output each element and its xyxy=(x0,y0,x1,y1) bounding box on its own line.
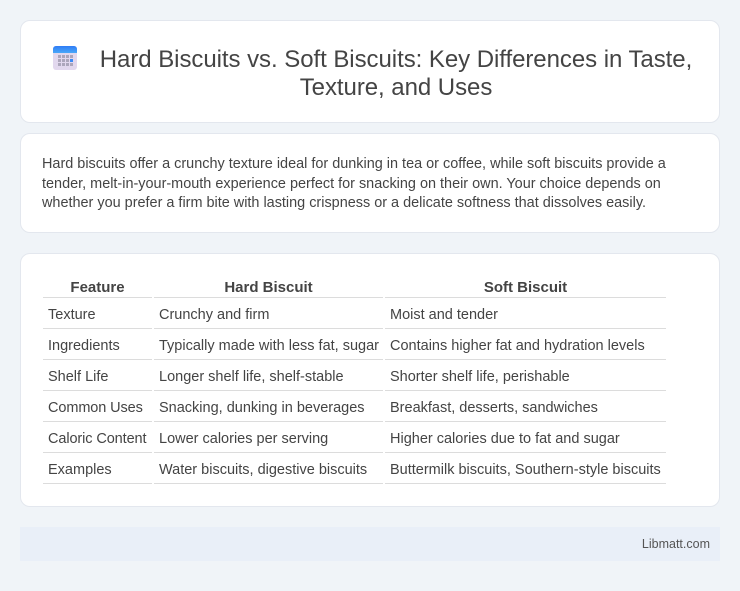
row: Shelf Life: Shorter shelf life, perishable xyxy=(390,369,570,385)
panel: title card xyxy=(20,20,720,123)
row: Examples: Buttermilk biscuits, Southern-style biscuits xyxy=(390,462,661,478)
footer text: Libmatt.com xyxy=(642,537,710,551)
row: Ingredients xyxy=(43,338,666,360)
row: Shelf Life xyxy=(43,369,666,391)
row: Caloric Content: Higher calories due to fat and sugar xyxy=(390,431,620,447)
row: Shelf Life: Longer shelf life, shelf-stable xyxy=(159,369,344,385)
row: Common Uses: Breakfast, desserts, sandwiches xyxy=(390,400,598,416)
row: Ingredients: Contains higher fat and hydration levels xyxy=(390,338,645,354)
table header: Hard Biscuit xyxy=(224,279,313,296)
row: Common Uses: Common Uses xyxy=(48,400,143,416)
row: Common Uses xyxy=(43,400,666,422)
row: Examples: Water biscuits, digestive biscuits xyxy=(159,462,367,478)
text block: summary: tender, melt-in-your-mouth experience perfect for snacking on their own. Your choice depends on xyxy=(42,176,661,192)
row: Caloric Content: Caloric Content xyxy=(48,431,146,447)
row: Shelf Life: Shelf Life xyxy=(48,369,108,385)
row: Ingredients: Typically made with less fat, sugar xyxy=(159,338,379,354)
text block: summary: Hard biscuits offer a crunchy texture ideal for dunking in tea or coffee, while soft biscuits provide a xyxy=(42,156,666,172)
row: Texture: Texture xyxy=(48,307,96,323)
row: Examples: Examples xyxy=(48,462,112,478)
row: Caloric Content xyxy=(43,431,666,453)
table header: Soft Biscuit xyxy=(484,279,567,296)
table header xyxy=(43,279,666,298)
row: Examples xyxy=(43,462,666,484)
row: Common Uses: Snacking, dunking in beverages xyxy=(159,400,365,416)
text block: summary: whether you prefer a firm bite with lasting crispness or a delicate softness that dissolves easily. xyxy=(42,195,646,211)
row: Texture: Crunchy and firm xyxy=(159,307,269,323)
table header: Feature xyxy=(70,279,125,296)
panel: comparison table xyxy=(20,253,720,507)
title: Texture, and Uses xyxy=(300,74,492,101)
row: Texture: Moist and tender xyxy=(390,307,498,323)
text block: summary xyxy=(42,156,666,211)
footer bar xyxy=(20,527,720,561)
title xyxy=(100,46,692,101)
row: Texture xyxy=(43,307,666,329)
title: Hard Biscuits vs. Soft Biscuits: Key Differences in Taste, xyxy=(100,46,692,73)
panel: summary xyxy=(20,133,720,233)
icon: calendar xyxy=(53,46,77,70)
row: Ingredients: Ingredients xyxy=(48,338,120,354)
row: Caloric Content: Lower calories per serving xyxy=(159,431,328,447)
